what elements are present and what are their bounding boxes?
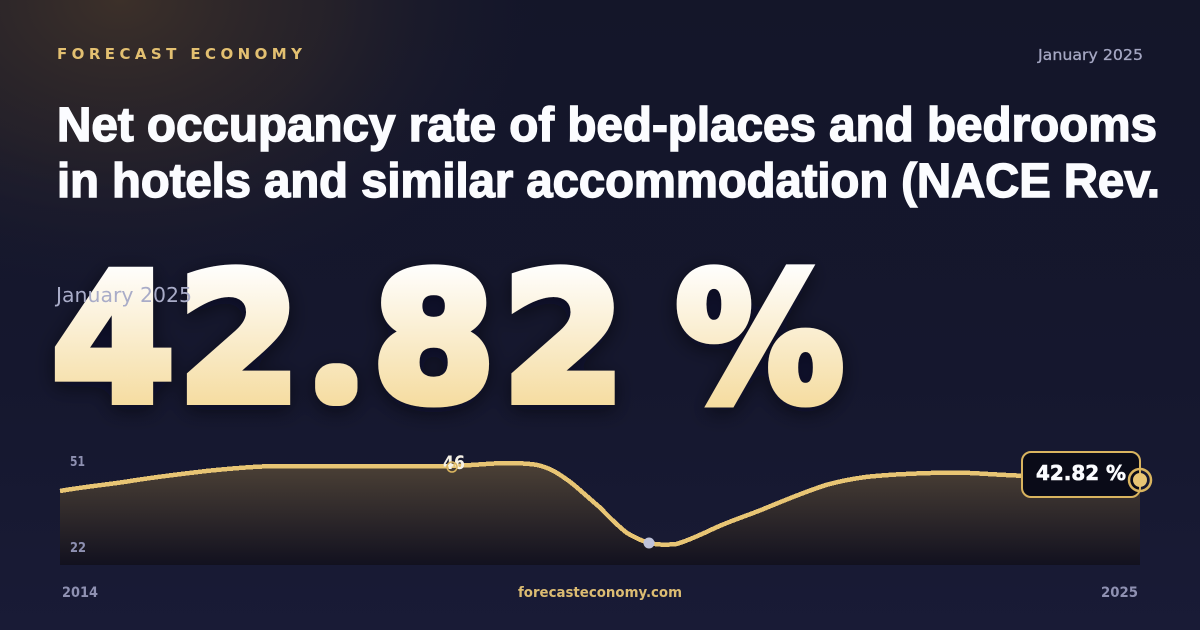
value callout: 42.82 %	[1036, 461, 1126, 485]
big value: %	[676, 238, 844, 442]
chart line	[60, 463, 1140, 545]
big value: .	[330, 356, 343, 397]
low marker	[644, 538, 654, 548]
end marker	[1129, 469, 1151, 491]
source url: forecasteconomy.com	[518, 585, 682, 601]
value callout	[1022, 452, 1140, 497]
big value: 42	[52, 237, 300, 442]
date overlay: January 2025	[54, 283, 192, 307]
area chart	[60, 452, 1151, 565]
title: in hotels and similar accommodation (NACE Rev.	[57, 155, 1160, 208]
axis max label: 51	[70, 455, 85, 470]
date top right: January 2025	[1037, 46, 1143, 64]
chart area fill	[60, 463, 1140, 565]
axis min label: 22	[70, 541, 86, 556]
start year: 2014	[62, 585, 98, 601]
title: Net occupancy rate of bed-places and bedrooms	[57, 99, 1157, 152]
title	[57, 99, 1160, 208]
brand label: FORECAST ECONOMY	[57, 45, 303, 63]
big value: 82	[372, 237, 625, 442]
peak value label: 46	[443, 452, 465, 474]
end year: 2025	[1101, 585, 1138, 601]
peak marker	[447, 462, 457, 472]
big value	[52, 237, 844, 442]
